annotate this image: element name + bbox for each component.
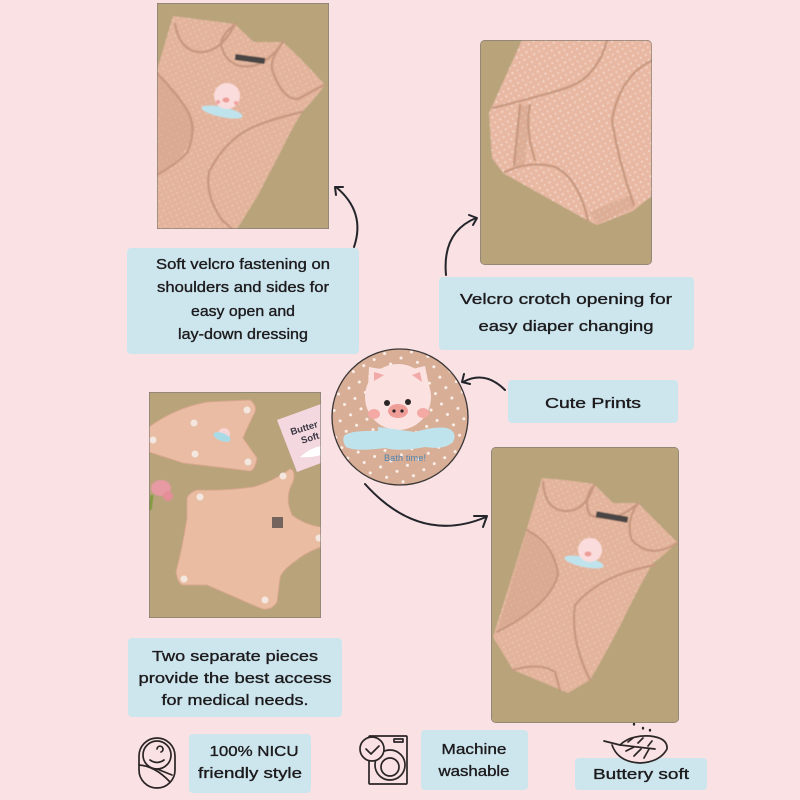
panel: velcro fastening callout: shoulders and sides for [157,279,329,296]
photo: crotch opening close-up [480,40,653,265]
panel: cute prints callout [508,380,678,423]
panel: velcro fastening callout: easy open and [191,303,295,320]
panel: buttery soft label: Buttery soft [593,766,690,783]
panel: NICU friendly label: 100% NICU [210,743,298,760]
arrow: to full onesie photo [365,484,487,527]
arrow: to crotch photo [446,215,477,275]
panel: crotch opening callout [439,277,694,350]
photo: onesie with shoulder and side fastening [157,3,329,229]
icon: feather [604,724,667,763]
arrow: to first photo [335,187,357,247]
panel: crotch opening callout: Velcro crotch opening for [460,291,672,308]
panel: cute prints callout: Cute Prints [545,395,641,412]
panel: separate pieces callout: for medical needs. [162,692,308,709]
print card: Soft [300,430,322,447]
panel: machine washable label [421,730,528,790]
panel: crotch opening callout: easy diaper changing [478,318,654,335]
flower [150,480,173,510]
arrow: to circle print [462,374,505,390]
panel: NICU friendly label [189,734,311,793]
panel: NICU friendly label: friendly style [198,765,302,782]
panel: velcro fastening callout [127,248,359,354]
panel: buttery soft label [575,758,707,790]
print card: Butter [289,419,320,438]
photo: full onesie [491,447,679,723]
panel: separate pieces callout: provide the best access [138,670,332,687]
panel: machine washable label: washable [437,763,510,780]
garment piece: star [176,469,321,609]
photo: two separate pieces [149,392,322,618]
circle print close-up: Bath time! [384,453,426,463]
panel: separate pieces callout [128,638,342,717]
icon: washing machine [360,736,407,784]
print card [277,404,322,472]
panel: velcro fastening callout: lay-down dressing [178,326,308,343]
panel: machine washable label: Machine [442,741,506,758]
garment piece: top [149,400,257,471]
circle print close-up [332,349,468,485]
panel: velcro fastening callout: Soft velcro fastening on [156,256,330,273]
icon: swaddled baby [139,738,175,788]
panel: separate pieces callout: Two separate pieces [152,648,318,665]
